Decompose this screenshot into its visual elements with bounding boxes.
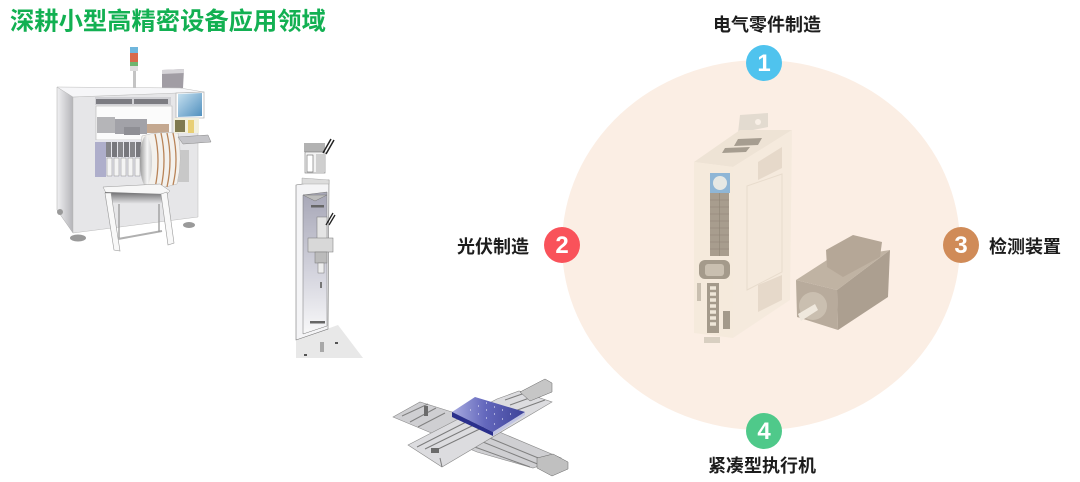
label: photovoltaic: 光伏制造 [457, 236, 529, 257]
badge 4 [746, 413, 782, 449]
motor shaft [798, 304, 818, 321]
illustration: XY stage [393, 379, 568, 476]
carriage [308, 213, 335, 273]
control screen [174, 92, 204, 133]
title: 深耕小型高精密设备应用领域 [10, 8, 326, 36]
upper rail grooves [417, 393, 545, 467]
base plate [296, 325, 363, 358]
bench [103, 184, 174, 251]
motor body [796, 235, 890, 330]
badge 4: 4 [757, 418, 771, 445]
base bolts [304, 342, 338, 356]
upper axis rail [408, 391, 552, 467]
ethernet ports [722, 138, 762, 153]
badge 3: 3 [954, 232, 968, 259]
illustration: vertical linear actuator [296, 139, 363, 358]
machine left side [57, 87, 73, 233]
lower rail grooves [402, 404, 548, 467]
illustration: servo driver and motor [694, 113, 890, 343]
motor encoder cap [826, 235, 882, 277]
side panel and vents [747, 147, 782, 312]
badge 1 [746, 45, 782, 81]
illustration: placement machine [57, 47, 211, 251]
top motor [302, 139, 334, 201]
lower terminal block [697, 283, 730, 333]
motor flange [799, 292, 827, 320]
label: compact actuator: 紧凑型执行机 [708, 456, 816, 476]
motors [424, 379, 568, 476]
label: inspection: 检测装置 [989, 236, 1061, 257]
machine top [57, 87, 204, 97]
keyboard [178, 135, 211, 144]
panel: peach circle [562, 60, 960, 430]
label: electrical parts: 电气零件制造 [713, 15, 821, 35]
labels on rail [310, 205, 325, 324]
column [296, 180, 329, 340]
blue dial [710, 173, 730, 193]
badge 2 [544, 227, 580, 263]
connector [699, 260, 730, 279]
terminal block [710, 193, 729, 256]
lower bay with feeders [95, 140, 144, 177]
badge 2: 2 [555, 232, 569, 259]
driver foot clip [704, 337, 720, 343]
driver top [694, 130, 792, 167]
driver front [694, 162, 733, 338]
lower axis rail [393, 402, 561, 468]
driver mounting bracket [738, 113, 768, 133]
machine front body [73, 92, 198, 233]
machine feet [57, 209, 195, 242]
signal tower [130, 47, 138, 89]
upper window [95, 97, 172, 140]
driver side [733, 130, 792, 338]
blue table [452, 397, 525, 436]
small monitor on top [162, 69, 184, 88]
badge 1: 1 [757, 50, 771, 77]
badge 3 [943, 227, 979, 263]
rail channel [303, 192, 327, 334]
tape reels [140, 132, 189, 188]
